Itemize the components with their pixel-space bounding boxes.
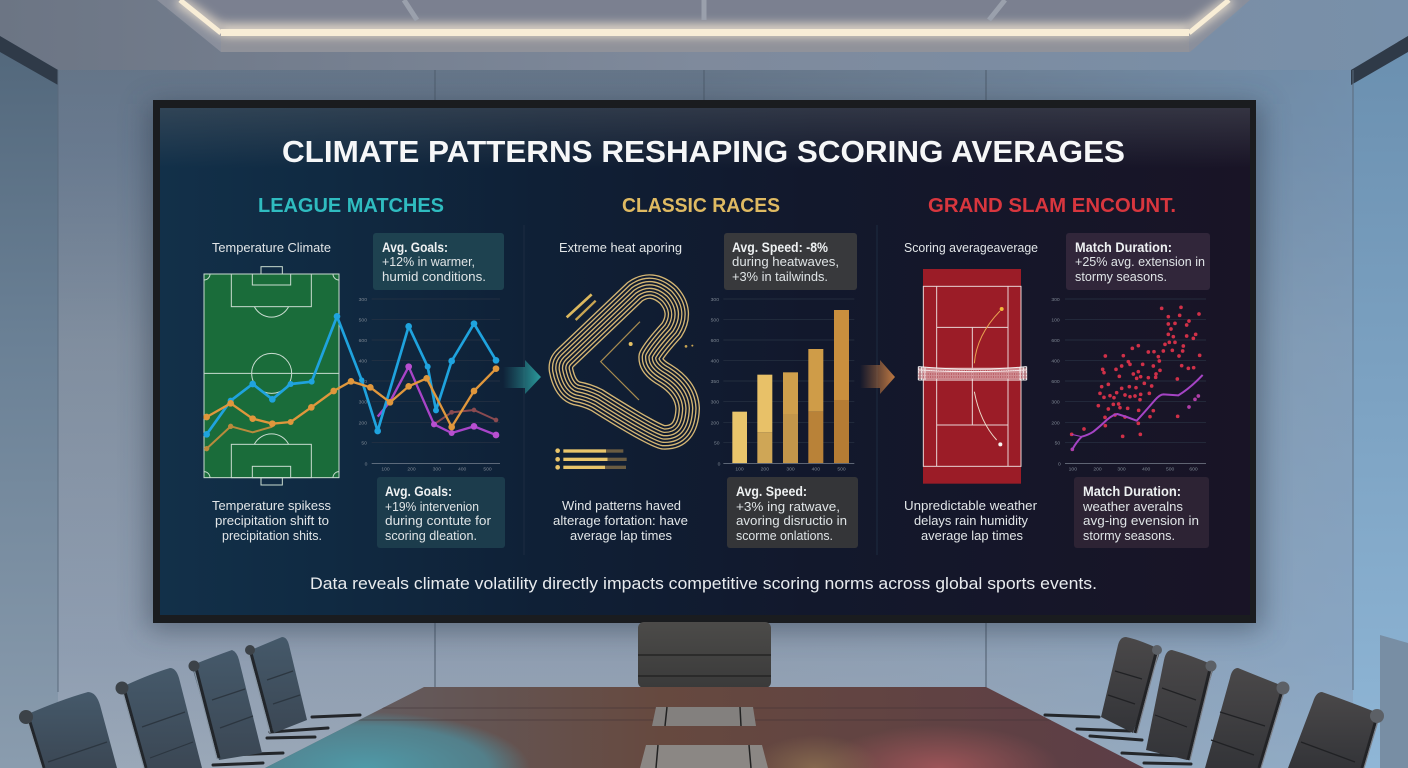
subheading: extreme heat: Extreme heat aporing [559,240,682,255]
callout: average speed rainwave: scorme onlations. [736,528,833,543]
text block: classic races note: alterage fortation: have [553,513,688,528]
callout: average goals warm [373,233,504,290]
line chart: league matches: 0 [365,461,368,467]
footer takeaway: Data reveals climate volatility directly impacts competitive scoring norms across global sports events. [310,574,1097,593]
callout: average goals duration: scoring dleation. [385,528,477,543]
scatter chart: grand slam: 600 [1051,338,1060,344]
callout: match duration extension: +25% avg. extension in [1075,254,1205,269]
scatter chart: grand slam: 500 [1166,467,1175,473]
callout: average goals duration: during contute for [385,513,492,528]
icon: football pitch [204,267,339,485]
text block: classic races note [553,498,688,543]
line chart: league matches [203,297,500,473]
text block: classic races note: average lap times [570,528,672,543]
callout: average goals warm: humid conditions. [382,269,486,284]
bar chart: classic races: 350 [711,379,719,385]
icon: track legend bars [555,448,627,470]
scatter chart: grand slam: 200 [1051,420,1060,426]
callout: match duration extension [1066,233,1210,290]
subheading: scoring average: Scoring averageaverage [904,240,1038,255]
text block: league matches note: precipitation shits. [222,528,322,543]
callout: average goals duration: +19% intervenion [385,499,479,514]
scatter chart: grand slam: 0 [1058,461,1061,467]
callout: match duration weather: Match Duration: [1083,484,1181,499]
bar chart: classic races: 200 [711,420,719,426]
scatter chart: grand slam: 400 [1142,467,1151,473]
line chart: league matches: 300 [433,467,441,473]
scatter chart: grand slam: 50 [1055,441,1060,447]
chair: head of table [638,622,771,688]
chairs: left side [19,637,360,768]
bar chart: classic races: 300 [786,467,795,473]
callout: average speed heatwaves: Avg. Speed: -8% [732,240,828,255]
line chart: league matches: 350 [359,379,367,385]
callout: match duration weather: avg-ing evension in [1083,513,1199,528]
panel: grand slam encounters [904,194,1210,548]
line chart: league matches: 500 [359,318,367,324]
bar chart: classic races: 600 [711,338,719,344]
callout: average speed rainwave: avoring disructio in [736,513,847,528]
bar chart: classic races: 200 [761,467,769,473]
scatter chart: grand slam: 200 [1093,467,1102,473]
scatter chart: grand slam: 400 [1051,358,1060,364]
conference table [200,687,1144,768]
bar chart: classic races: 100 [735,467,744,473]
heading: classic races: CLASSIC RACES [622,194,780,217]
bar chart: classic races: 300 [711,400,719,406]
callout: match duration weather [1074,477,1209,548]
scatter chart: grand slam: 600 [1189,467,1198,473]
chairs: right side [1045,637,1384,768]
line chart: league matches: 500 [483,467,492,473]
callout: average speed heatwaves: during heatwaves, [732,254,839,269]
scatter chart: grand slam [1051,297,1206,473]
line chart: league matches: 400 [359,358,367,364]
text block: league matches note [212,498,331,543]
wall display bezel [148,100,1262,630]
screen background [160,108,1250,615]
bar chart: classic races: 300 [711,297,719,303]
arrow: league to races [503,360,541,394]
icon: tennis court [918,269,1027,484]
callout: average goals duration [377,477,505,548]
line chart: league matches: 200 [407,467,416,473]
arrow: races to grand slam [860,360,895,394]
callout: average goals duration: Avg. Goals: [385,484,452,499]
text block: grand slam note: Unpredictable weather [904,498,1038,513]
bar chart: classic races: 50 [714,441,720,447]
title: CLIMATE PATTERNS RESHAPING SCORING AVERAGES [282,135,1125,169]
text block: classic races note: Wind patterns haved [562,498,681,513]
line chart: league matches: 300 [359,400,367,406]
subheading: temperature climate: Temperature Climate [212,240,331,255]
text block: grand slam note: delays rain humidity [914,513,1028,528]
ceiling light soffit [157,0,1250,52]
line chart: league matches: 100 [381,467,390,473]
panel: league matches [203,194,505,548]
callout: average speed rainwave: Avg. Speed: [736,484,807,499]
icon: race track [561,287,693,437]
scatter chart: grand slam: 300 [1051,297,1060,303]
text block: grand slam note [904,498,1038,543]
scatter chart: grand slam: 100 [1069,467,1077,473]
callout: average goals warm: +12% in warmer, [382,254,475,269]
heading: league matches: LEAGUE MATCHES [258,194,444,217]
line chart: league matches: 200 [359,420,367,426]
scatter chart: grand slam: 600 [1051,379,1060,385]
text block: league matches note: Temperature spikess [212,498,331,513]
callout: match duration weather: stormy seasons. [1083,528,1175,543]
heading: grand slam: GRAND SLAM ENCOUNT. [928,194,1176,217]
text block: grand slam note: average lap times [921,528,1023,543]
bar chart: classic races: 400 [711,358,719,364]
line chart: league matches: 300 [359,297,367,303]
scatter chart: grand slam: 100 [1051,318,1060,324]
bar chart: classic races: 400 [812,467,820,473]
line chart: league matches: 50 [361,441,367,447]
scatter chart: grand slam: 300 [1051,400,1060,406]
callout: average speed heatwaves [724,233,857,290]
bar chart: classic races: 500 [711,318,719,324]
callout: average goals warm: Avg. Goals: [382,240,448,255]
callout: match duration extension: stormy seasons. [1075,269,1167,284]
callout: match duration extension: Match Duration: [1075,240,1172,255]
callout: match duration weather: weather averalns [1082,499,1184,514]
callout: average speed rainwave [727,477,858,548]
callout: average speed rainwave: +3% ing ratwave, [736,499,840,514]
bar chart: classic races: 500 [837,467,846,473]
bar chart: classic races [711,297,854,473]
panel: classic races [553,194,858,548]
line chart: league matches: 400 [458,467,467,473]
text block: league matches note: precipitation shift to [215,513,329,528]
callout: average speed heatwaves: +3% in tailwinds. [732,269,828,284]
line chart: league matches: 600 [359,338,367,344]
scatter chart: grand slam: 300 [1117,467,1126,473]
bar chart: classic races: 0 [718,461,721,467]
